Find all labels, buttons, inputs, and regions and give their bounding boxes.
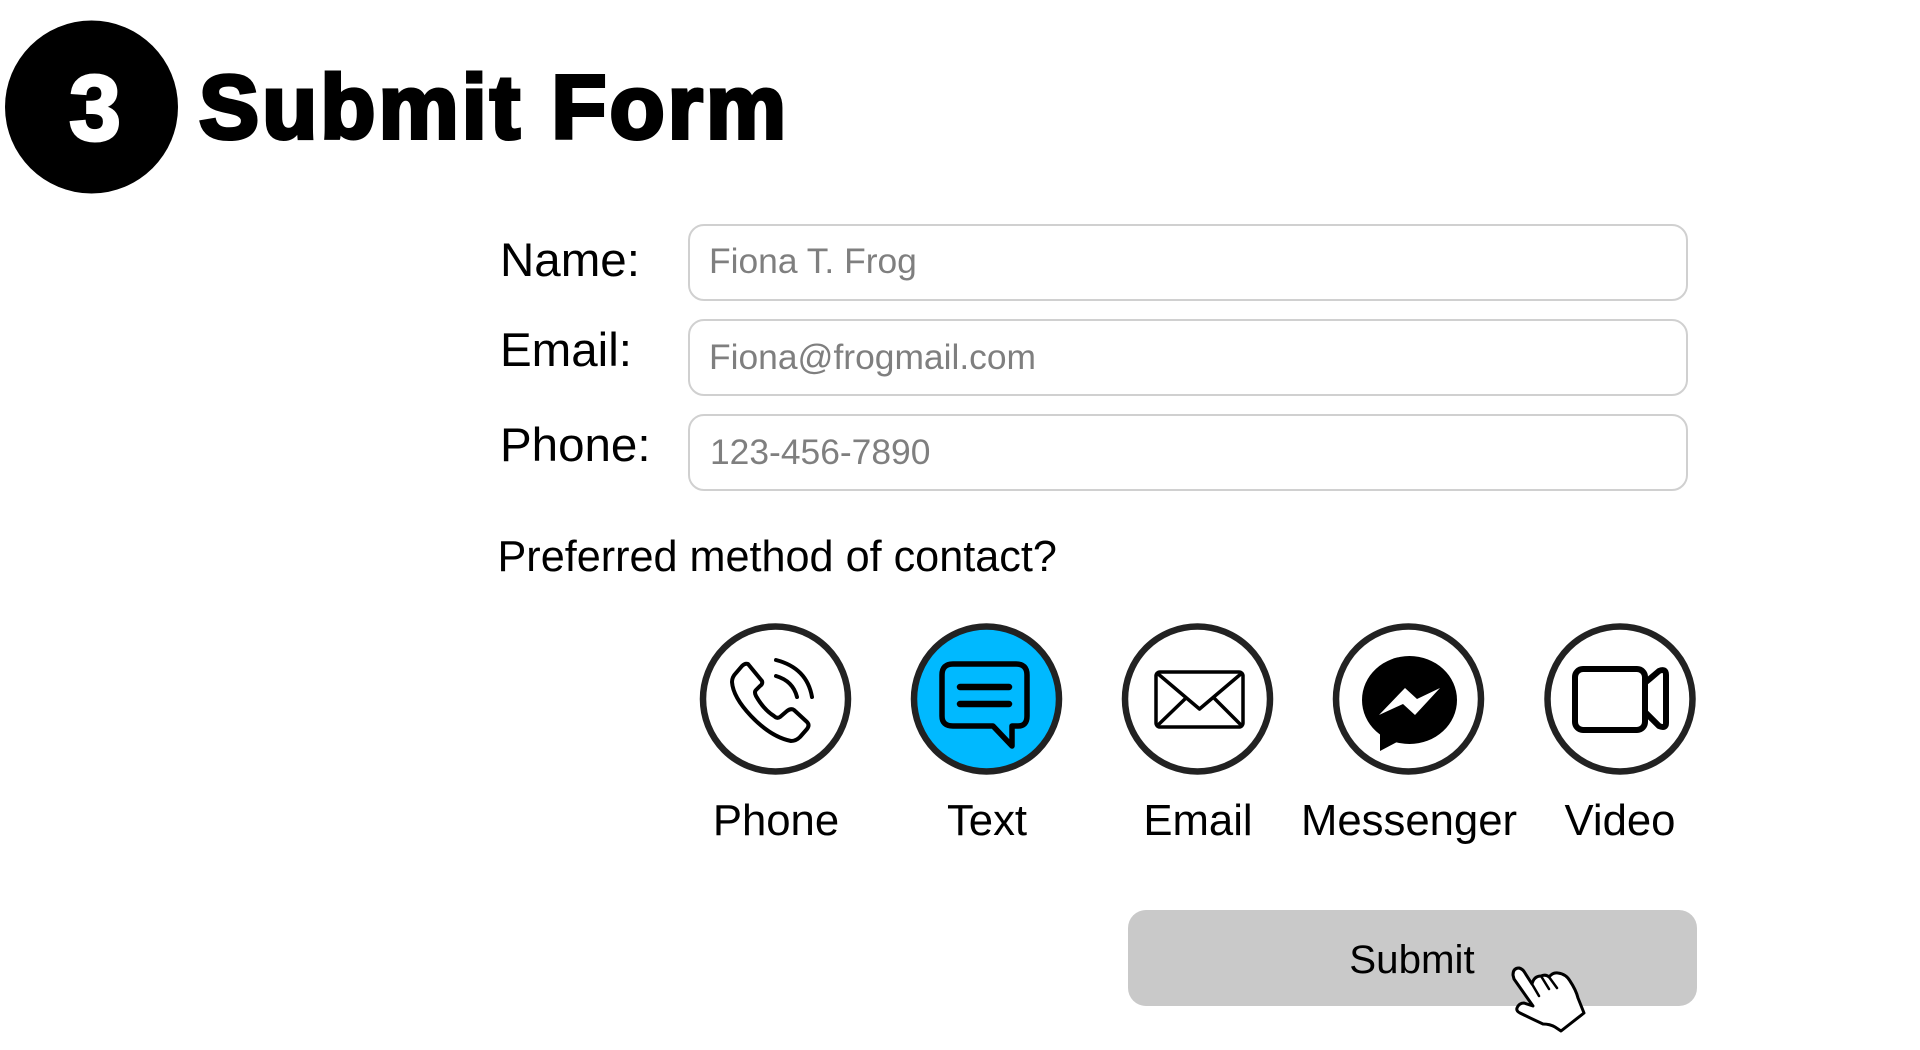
contact options: [703, 626, 1692, 845]
step number badge: 3: [69, 56, 121, 160]
title: Submit Form: [199, 58, 786, 158]
field: phone: 123-456-7890: [710, 432, 930, 472]
option: text (selected): [914, 626, 1059, 845]
option: phone: Phone: [713, 796, 839, 845]
option: phone: [703, 626, 848, 845]
option: email: [1125, 626, 1270, 845]
field: email: [500, 320, 1687, 395]
field: phone: Phone:: [500, 419, 651, 472]
form fields: [500, 225, 1687, 490]
submit button: Submit: [1349, 937, 1475, 982]
field: name: Fiona T. Frog: [709, 241, 917, 281]
option: video: [1548, 626, 1692, 845]
step number badge: [5, 20, 178, 194]
submit button: [1128, 910, 1697, 1006]
option: messenger: [1301, 626, 1517, 845]
option: text (selected): Text: [947, 796, 1027, 845]
icon: pointing hand cursor: [1513, 968, 1584, 1031]
field: name: [500, 225, 1687, 300]
option: messenger: Messenger: [1301, 796, 1517, 845]
option: video: Video: [1565, 796, 1675, 845]
contact method question: Preferred method of contact?: [498, 533, 1057, 581]
field: name: Name:: [500, 234, 640, 287]
field: phone: [500, 415, 1687, 490]
field: email: Email:: [500, 324, 632, 377]
field: email: Fiona@frogmail.com: [709, 337, 1036, 377]
option: email: Email: [1143, 796, 1253, 845]
